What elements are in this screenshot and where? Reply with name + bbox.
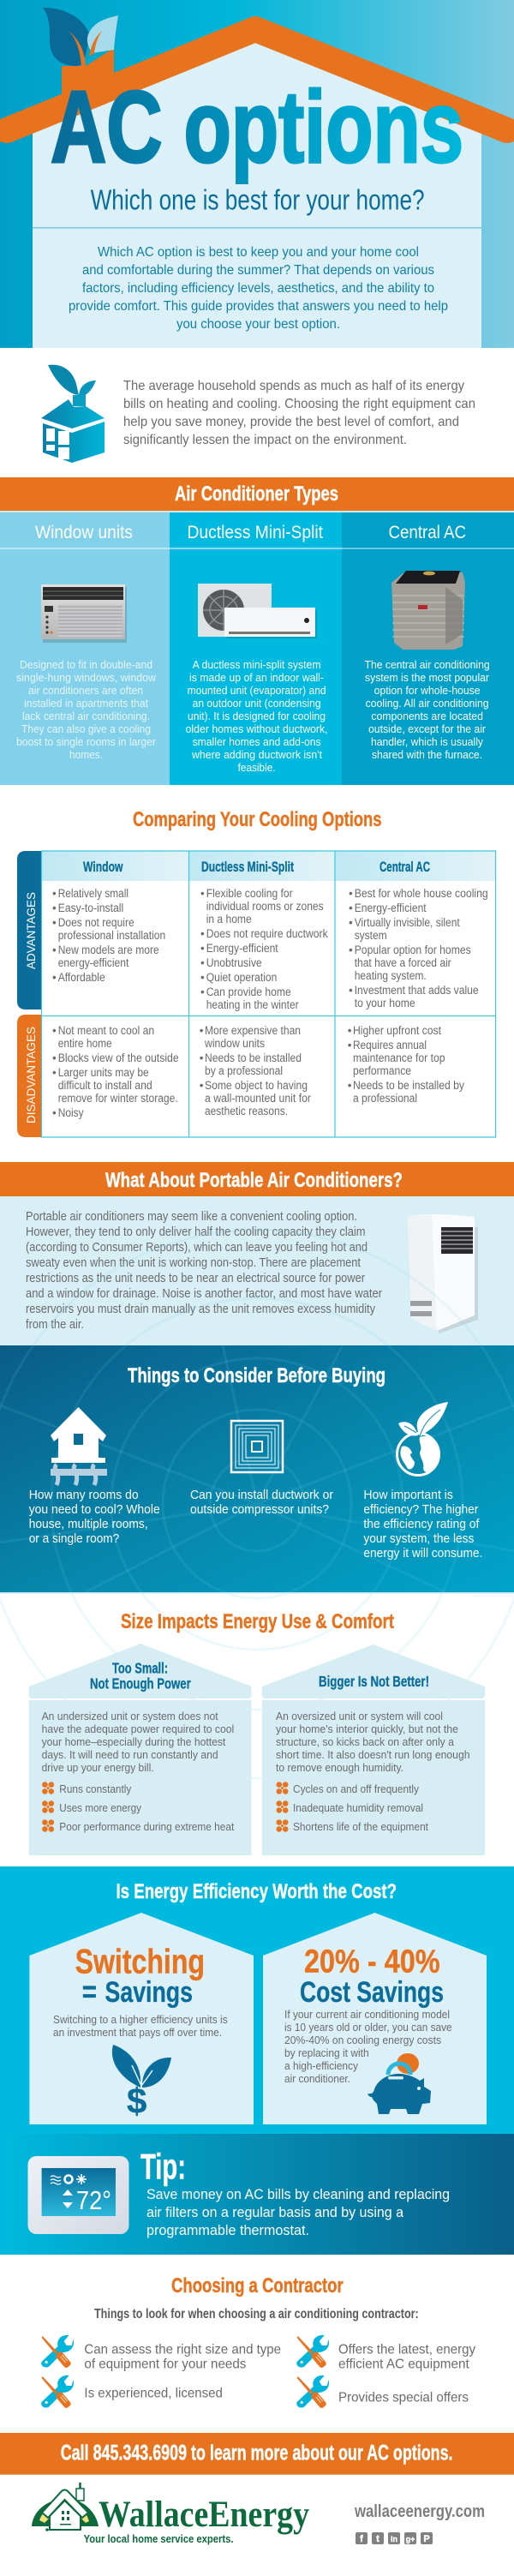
icon: green house bbox=[41, 365, 105, 463]
advantages: central: • bbox=[349, 944, 353, 956]
description: mini-split: mounted unit (evaporator) and bbox=[188, 684, 326, 697]
description: oversized: to remove enough humidity. bbox=[276, 1761, 403, 1774]
advantages: window: Easy-to-install bbox=[58, 902, 123, 914]
panel: central AC: Central AC bbox=[389, 523, 466, 542]
icon: money plant: $ bbox=[127, 2081, 146, 2121]
panel: bigger is not better bbox=[262, 1644, 485, 1855]
tab: disadvantages bbox=[17, 1015, 41, 1137]
disadvantages: central: maintenance for top bbox=[353, 1051, 445, 1064]
advantages: central: • bbox=[349, 902, 353, 914]
card: switching bbox=[29, 1913, 254, 2124]
description: oversized: short time. It also doesn't run long enough bbox=[276, 1748, 469, 1761]
advantages: window: • bbox=[52, 887, 57, 900]
advantages: mini-split: in a home bbox=[206, 913, 252, 926]
advantages: central: • bbox=[349, 916, 353, 929]
disadvantages: window: Larger units may be bbox=[58, 1066, 149, 1079]
tab: advantages bbox=[17, 851, 41, 1009]
header row: Window bbox=[83, 860, 123, 875]
description: central AC: The central air conditioning bbox=[365, 658, 490, 671]
advantages: window bbox=[52, 887, 165, 984]
portable unit image bbox=[408, 1214, 478, 1333]
text: rooms: How many rooms do bbox=[29, 1488, 139, 1502]
text: efficiency: energy it will consume. bbox=[363, 1546, 482, 1561]
icon: globe with leaves bbox=[397, 1402, 448, 1476]
banner: air conditioner types: Air Conditioner Types bbox=[175, 482, 338, 506]
disadvantages: window: • bbox=[52, 1106, 57, 1119]
intro text: Which AC option is best to keep you and your home cool bbox=[98, 245, 419, 260]
card: switching: Switching bbox=[75, 1944, 205, 1981]
description: mini-split: A ductless mini-split system bbox=[193, 658, 321, 671]
panel: energy efficiency bbox=[0, 1866, 514, 2134]
panel: central AC bbox=[342, 512, 514, 785]
text: household energy: help you save money, provide the best level of comfort, and bbox=[123, 415, 459, 429]
card: switching: Savings bbox=[105, 1976, 193, 2009]
logo house bbox=[32, 2483, 99, 2531]
banner: air conditioner types bbox=[0, 477, 514, 511]
list: too small bbox=[42, 1782, 235, 1833]
list: contractor criteria: efficient AC equipment bbox=[338, 2357, 469, 2372]
disadvantages: window: entire home bbox=[58, 1037, 112, 1050]
description: central AC: outside, except for the air bbox=[368, 722, 487, 735]
advantages: central: to your home bbox=[355, 997, 415, 1009]
text: ductwork: outside compressor units? bbox=[190, 1502, 329, 1517]
intro text bbox=[69, 245, 448, 332]
disadvantages: central: Requires annual bbox=[353, 1039, 427, 1051]
description: mini-split: older homes without ductwork, bbox=[186, 722, 328, 735]
intro text: you choose your best option. bbox=[176, 317, 340, 332]
disadvantages: mini-split: • bbox=[200, 1051, 204, 1064]
advantages: central: Energy-efficient bbox=[355, 902, 427, 914]
text: household energy: The average household spends as much as half of its energy bbox=[123, 379, 464, 393]
text: efficiency bbox=[363, 1488, 482, 1561]
disadvantages: window: Blocks view of the outside bbox=[58, 1051, 179, 1064]
advantages: window: professional installation bbox=[58, 929, 165, 942]
card: cost savings: Cost Savings bbox=[300, 1976, 444, 2009]
disadvantages: window: • bbox=[52, 1024, 57, 1037]
advantages: window: • bbox=[52, 971, 57, 984]
advantages: mini-split: Flexible cooling for bbox=[206, 887, 293, 900]
panel: window units bbox=[0, 512, 170, 785]
advantages: window: • bbox=[52, 944, 57, 956]
heading: comparing options: Comparing Your Cooling Options bbox=[133, 808, 382, 831]
mini-split image bbox=[198, 584, 317, 638]
social icons: t bbox=[376, 2534, 380, 2544]
disadvantages: window: Noisy bbox=[58, 1106, 84, 1119]
description: too small: drive up your energy bill. bbox=[42, 1761, 154, 1774]
text: rooms: house, multiple rooms, bbox=[29, 1517, 148, 1531]
description: oversized: An oversized unit or system will cool bbox=[276, 1710, 443, 1722]
description: window units: lack central air conditioning. bbox=[22, 710, 150, 722]
disadvantages: mini-split: More expensive than bbox=[205, 1024, 301, 1037]
subheading: things to look for: Things to look for when choosing a air conditioning contractor: bbox=[94, 2307, 419, 2321]
header row: Central AC bbox=[380, 860, 430, 875]
social icons: f bbox=[360, 2534, 363, 2544]
list: oversized: Inadequate humidity removal bbox=[293, 1801, 423, 1814]
advantages: window: • bbox=[52, 916, 57, 929]
advantages: mini-split: Can provide home bbox=[206, 985, 291, 998]
logo: Wallace Energy: WallaceEnergy bbox=[99, 2495, 309, 2535]
advantages: mini-split: • bbox=[200, 971, 205, 984]
advantages: central: that have a forced air bbox=[355, 956, 451, 969]
panel: ductless mini-split: Ductless Mini-Split bbox=[187, 523, 323, 542]
icon: piggy bank bbox=[368, 2053, 431, 2114]
heading: size impacts: Size Impacts Energy Use & Comfort bbox=[121, 1610, 394, 1633]
card: cost savings: 20% - 40% bbox=[304, 1944, 440, 1980]
panel: window units: Window units bbox=[35, 523, 133, 542]
panel: portable AC bbox=[0, 1196, 514, 1345]
portable text: reservoirs you must drain manually as the unit removes excess humidity bbox=[26, 1303, 376, 1316]
card: switching: Switching to a higher efficiency units is bbox=[53, 2013, 228, 2026]
social icons: in bbox=[391, 2535, 397, 2543]
banner: portable air conditioners: What About Portable Air Conditioners? bbox=[105, 1169, 403, 1192]
advantages: mini-split: • bbox=[200, 887, 205, 900]
advantages: central: Popular option for homes bbox=[355, 944, 471, 956]
icon: money plant bbox=[112, 2045, 171, 2121]
advantages: mini-split: • bbox=[200, 942, 205, 955]
logo: Wallace Energy: Your local home service experts. bbox=[84, 2532, 233, 2545]
description: window units: They can also give a cooling bbox=[21, 722, 151, 735]
description: window units: homes. bbox=[69, 748, 103, 761]
description: oversized: your home's interior quickly, but not the bbox=[276, 1722, 458, 1735]
description: window units: boost to single rooms in larger bbox=[16, 735, 157, 748]
advantages: mini-split: individual rooms or zones bbox=[206, 900, 324, 913]
icon: radiant floor house bbox=[51, 1407, 107, 1485]
disadvantages: window bbox=[52, 1024, 179, 1119]
tab: disadvantages: DISADVANTAGES bbox=[25, 1027, 38, 1123]
advantages: central: • bbox=[349, 887, 353, 900]
list: oversized: Cycles on and off frequently bbox=[293, 1782, 419, 1795]
description: mini-split bbox=[186, 658, 328, 774]
panel: too small: Not Enough Power bbox=[90, 1675, 191, 1692]
window unit image bbox=[41, 584, 127, 643]
portable text bbox=[26, 1210, 382, 1332]
intro text: factors, including efficiency levels, aesthetics, and the ability to bbox=[82, 281, 434, 296]
description: central AC bbox=[365, 658, 490, 761]
website: wallaceenergy.com bbox=[354, 2502, 485, 2521]
portable text: Portable air conditioners may seem like a convenient cooling option. bbox=[26, 1210, 357, 1224]
text: rooms: you need to cool? Whole bbox=[29, 1502, 160, 1517]
house wall panel bbox=[33, 43, 481, 348]
text: efficiency: the efficiency rating of bbox=[363, 1517, 480, 1531]
portable text: from the air. bbox=[26, 1318, 84, 1332]
disadvantages: central: a professional bbox=[353, 1092, 417, 1105]
list: contractor criteria: of equipment for your needs bbox=[84, 2357, 246, 2372]
text: efficiency: How important is bbox=[363, 1488, 453, 1502]
social icons: P bbox=[423, 2534, 430, 2544]
disadvantages: window: difficult to install and bbox=[58, 1079, 152, 1092]
disadvantages: central: • bbox=[348, 1024, 352, 1037]
intro text: provide comfort. This guide provides that answers you need to help bbox=[69, 299, 448, 314]
text: household energy bbox=[123, 379, 475, 447]
text: ductwork bbox=[190, 1488, 333, 1517]
tip text: air filters on a regular basis and by using a bbox=[146, 2204, 404, 2220]
advantages: mini-split: Does not require ductwork bbox=[206, 927, 328, 940]
advantages: central: heating system. bbox=[355, 969, 427, 982]
description: central AC: components are located bbox=[371, 710, 483, 722]
description: mini-split: unit). It is designed for cooling bbox=[188, 710, 326, 722]
description: central AC: handler, which is usually bbox=[371, 735, 483, 748]
tab: advantages: ADVANTAGES bbox=[25, 892, 38, 969]
portable text: sweaty even when the unit is working non-stop. There are placement bbox=[26, 1256, 361, 1270]
description: cost savings: is 10 years old or older, you can save bbox=[284, 2021, 452, 2034]
advantages: mini-split: • bbox=[200, 985, 205, 998]
list: contractor criteria: Offers the latest, energy bbox=[338, 2343, 475, 2357]
heading: things to consider: Things to Consider Before Buying bbox=[128, 1364, 386, 1387]
description: too small bbox=[42, 1710, 234, 1774]
panel: things to consider bbox=[0, 1230, 514, 1778]
description: cost savings: a high-efficiency bbox=[284, 2059, 358, 2072]
header row bbox=[41, 851, 495, 881]
tip text: Save money on AC bills by cleaning and replacing bbox=[146, 2186, 450, 2202]
description: central AC: option for whole-house bbox=[374, 684, 481, 697]
advantages: mini-split: heating in the winter bbox=[206, 998, 299, 1011]
list: too small: Poor performance during extreme heat bbox=[59, 1820, 235, 1833]
description: central AC: shared with the furnace. bbox=[372, 748, 482, 761]
text: efficiency: efficiency? The higher bbox=[363, 1502, 478, 1517]
social icons bbox=[356, 2532, 433, 2544]
description: window units bbox=[16, 658, 157, 761]
disadvantages: mini-split: • bbox=[200, 1079, 204, 1092]
disadvantages: window: remove for winter storage. bbox=[58, 1092, 178, 1105]
portable text: restrictions as the unit needs to be near an electrical source for power bbox=[26, 1272, 365, 1285]
disadvantages: central bbox=[348, 1024, 464, 1105]
comparison table bbox=[17, 851, 495, 1137]
description: too small: days. It will need to run constantly and bbox=[42, 1748, 218, 1761]
list: oversized: Shortens life of the equipment bbox=[293, 1820, 428, 1833]
header row: Ductless Mini-Split bbox=[201, 860, 294, 875]
card: cost savings bbox=[263, 1913, 487, 2124]
panel: too small bbox=[29, 1644, 251, 1855]
disadvantages: mini-split: Needs to be installed bbox=[205, 1051, 302, 1064]
social icons: g+ bbox=[406, 2535, 415, 2543]
list: too small: Uses more energy bbox=[59, 1801, 141, 1814]
advantages: window: New models are more bbox=[58, 944, 159, 956]
portable text: However, they tend to only deliver half the cooling capacity they claim bbox=[26, 1225, 365, 1239]
text: ductwork: Can you install ductwork or bbox=[190, 1488, 333, 1502]
panel: ductless mini-split bbox=[170, 512, 342, 785]
text: rooms: or a single room? bbox=[29, 1531, 119, 1546]
description: central AC: cooling. All air conditioning bbox=[366, 697, 489, 710]
list: contractor criteria: Provides special offers bbox=[338, 2391, 469, 2405]
panel: tip bbox=[0, 2134, 514, 2255]
list: contractor criteria: Can assess the right size and type bbox=[84, 2343, 281, 2357]
advantages: window: energy-efficient bbox=[58, 956, 129, 969]
advantages: window: Relatively small bbox=[58, 887, 128, 900]
roof bbox=[7, 29, 507, 130]
description: mini-split: an outdoor unit (condensing bbox=[193, 697, 321, 710]
disadvantages: mini-split: aesthetic reasons. bbox=[205, 1105, 288, 1117]
advantages: central: Virtually invisible, silent bbox=[355, 916, 460, 929]
description: too small: An undersized unit or system does not bbox=[42, 1710, 218, 1722]
card: switching: an investment that pays off over time. bbox=[53, 2026, 222, 2039]
advantages: window: • bbox=[52, 902, 57, 914]
tip heading: Tip: bbox=[140, 2147, 186, 2187]
chimney bbox=[62, 48, 114, 111]
disadvantages: window: Not meant to cool an bbox=[58, 1024, 154, 1037]
disadvantages: window: • bbox=[52, 1066, 57, 1079]
icon: thermostat bbox=[27, 2156, 128, 2234]
advantages: mini-split: • bbox=[200, 956, 205, 969]
text: rooms bbox=[29, 1488, 160, 1546]
description: window units: Designed to fit in double-and bbox=[20, 658, 152, 671]
card: switching: = bbox=[82, 1974, 97, 2009]
description: mini-split: where adding ductwork isn't bbox=[191, 748, 322, 761]
heading: choosing a contractor: Choosing a Contractor bbox=[171, 2274, 344, 2297]
description: cost savings: If your current air conditioning model bbox=[284, 2008, 450, 2021]
advantages: mini-split bbox=[200, 887, 328, 1011]
tip text bbox=[146, 2186, 450, 2238]
banner: portable air conditioners bbox=[0, 1162, 514, 1196]
description: oversized: structure, so kicks back on after only a bbox=[276, 1735, 455, 1748]
description: cost savings: by replacing it with bbox=[284, 2046, 369, 2059]
disadvantages: mini-split: a wall-mounted unit for bbox=[205, 1092, 311, 1105]
text: household energy: significantly lessen the impact on the environment. bbox=[123, 433, 407, 447]
advantages: window: Does not require bbox=[58, 916, 134, 929]
text: efficiency: your system, the less bbox=[363, 1531, 474, 1546]
description: window units: installed in apartments that bbox=[24, 697, 148, 710]
disadvantages: central: performance bbox=[353, 1064, 411, 1077]
advantages: central: Investment that adds value bbox=[355, 984, 479, 997]
subtitle: Which one is best for your home? bbox=[91, 183, 425, 216]
list: contractor criteria bbox=[41, 2335, 475, 2409]
list: oversized bbox=[276, 1782, 428, 1833]
logo: Wallace Energy bbox=[32, 2483, 309, 2545]
text: household energy: bills on heating and cooling. Choosing the right equipment can bbox=[123, 397, 475, 411]
description: oversized bbox=[276, 1710, 469, 1774]
advantages: central bbox=[349, 887, 488, 1009]
disadvantages: central: Needs to be installed by bbox=[353, 1079, 464, 1092]
icon: leaves on chimney bbox=[43, 8, 118, 69]
advantages: central: • bbox=[349, 984, 353, 997]
description: window units: air conditioners are often bbox=[28, 684, 143, 697]
description: cost savings bbox=[284, 2008, 452, 2085]
description: cost savings: air conditioner. bbox=[284, 2072, 350, 2085]
tip text: programmable thermostat. bbox=[146, 2222, 309, 2238]
disadvantages: mini-split: • bbox=[200, 1024, 204, 1037]
heading: energy efficiency: Is Energy Efficiency Worth the Cost? bbox=[117, 1880, 397, 1903]
description: too small: have the adequate power required to cool bbox=[42, 1722, 234, 1735]
disadvantages: central: Higher upfront cost bbox=[353, 1024, 441, 1037]
description: mini-split: smaller homes and add-ons bbox=[193, 735, 321, 748]
central unit image bbox=[391, 571, 465, 650]
icon: thermostat: 72° bbox=[76, 2185, 111, 2215]
description: cost savings: 20%-40% on cooling energy costs bbox=[284, 2034, 441, 2046]
panel: too small: Too Small: bbox=[112, 1660, 168, 1677]
disadvantages: central: • bbox=[348, 1039, 352, 1051]
icon: ceiling vent bbox=[231, 1421, 283, 1472]
banner: call to action bbox=[0, 2433, 514, 2475]
disadvantages: mini-split: by a professional bbox=[205, 1064, 283, 1077]
disadvantages: central: • bbox=[348, 1079, 352, 1092]
description: central AC: system is the most popular bbox=[365, 671, 490, 684]
list: contractor criteria: Is experienced, licensed bbox=[84, 2387, 223, 2401]
list: too small: Runs constantly bbox=[59, 1782, 132, 1795]
intro text: and comfortable during the summer? That depends on various bbox=[82, 263, 434, 278]
advantages: mini-split: Quiet operation bbox=[206, 971, 277, 984]
panel: hero bbox=[0, 0, 514, 348]
description: window units: single-hung windows, window bbox=[16, 671, 157, 684]
description: too small: your home–especially during the hottest bbox=[42, 1735, 226, 1748]
portable text: and a window for drainage. Noise is another factor, and most have water bbox=[26, 1287, 382, 1301]
panel: bigger is not better: Bigger Is Not Better! bbox=[319, 1673, 429, 1690]
disadvantages: mini-split: window units bbox=[204, 1037, 265, 1050]
disadvantages: mini-split: Some object to having bbox=[205, 1079, 308, 1092]
advantages: mini-split: Energy-efficient bbox=[206, 942, 278, 955]
advantages: window: Affordable bbox=[58, 971, 105, 984]
advantages: mini-split: Unobtrusive bbox=[206, 956, 262, 969]
advantages: central: system bbox=[355, 929, 387, 942]
advantages: central: Best for whole house cooling bbox=[355, 887, 488, 900]
portable text: (according to Consumer Reports), which can leave you feeling hot and bbox=[26, 1241, 368, 1255]
disadvantages: mini-split bbox=[200, 1024, 311, 1117]
description: mini-split: feasible. bbox=[238, 761, 276, 774]
disadvantages: window: • bbox=[52, 1051, 57, 1064]
description: mini-split: is made up of an indoor wall- bbox=[189, 671, 324, 684]
advantages: mini-split: • bbox=[200, 927, 205, 940]
